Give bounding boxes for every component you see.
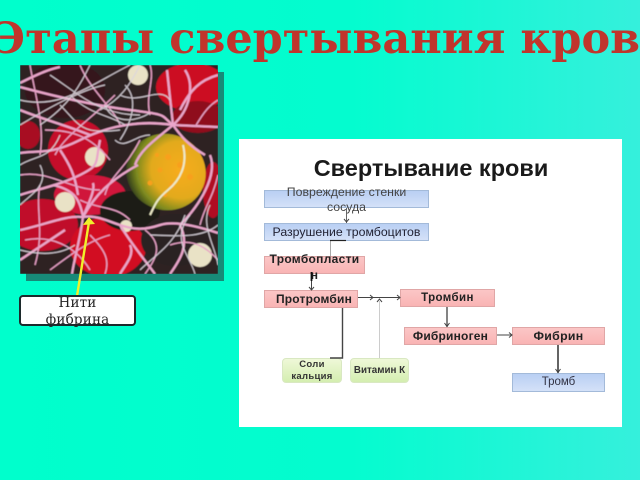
- box: calcium salts: Соли: [299, 359, 325, 370]
- box: thromboplastin: Тромбопласти: [270, 252, 359, 266]
- box: platelet breakdown: [264, 223, 429, 241]
- box: clot: [512, 373, 605, 392]
- box: platelet breakdown: Разрушение тромбоцитов: [273, 225, 420, 239]
- box: clot: Тромб: [542, 376, 575, 388]
- chart heading: Свертывание крови: [314, 155, 548, 181]
- box: vessel damage: Повреждение стенки: [287, 185, 406, 199]
- box: vitamin K: [350, 358, 409, 383]
- box: thrombin: [400, 289, 495, 307]
- box: thromboplastin: [264, 256, 365, 274]
- box: vessel damage: сосуда: [327, 200, 366, 214]
- arrow: yellow pointer to fibrin: [76, 217, 95, 295]
- callout: fibrin label: [19, 295, 136, 326]
- box: vessel damage: [264, 190, 429, 208]
- box: fibrin: [512, 327, 605, 345]
- connector lines: [308, 208, 561, 374]
- callout: fibrin label: Нити: [58, 295, 97, 311]
- box: prothrombin: Протромбин: [276, 292, 352, 306]
- photo: fibrin mesh with blood cells: [20, 65, 224, 281]
- panel: blood clotting flowchart: н: [311, 268, 318, 282]
- box: thrombin: Тромбин: [421, 292, 474, 304]
- box: fibrinogen: [404, 327, 497, 345]
- panel: blood clotting flowchart: [239, 139, 622, 427]
- box: calcium salts: кальция: [291, 371, 333, 382]
- callout: fibrin label: фибрина: [46, 312, 109, 328]
- box: fibrinogen: Фибриноген: [413, 329, 488, 343]
- box: vitamin K: Витамин К: [354, 365, 405, 376]
- box: calcium salts: [282, 358, 342, 383]
- box: prothrombin: [264, 290, 358, 308]
- box: fibrin: Фибрин: [534, 329, 583, 343]
